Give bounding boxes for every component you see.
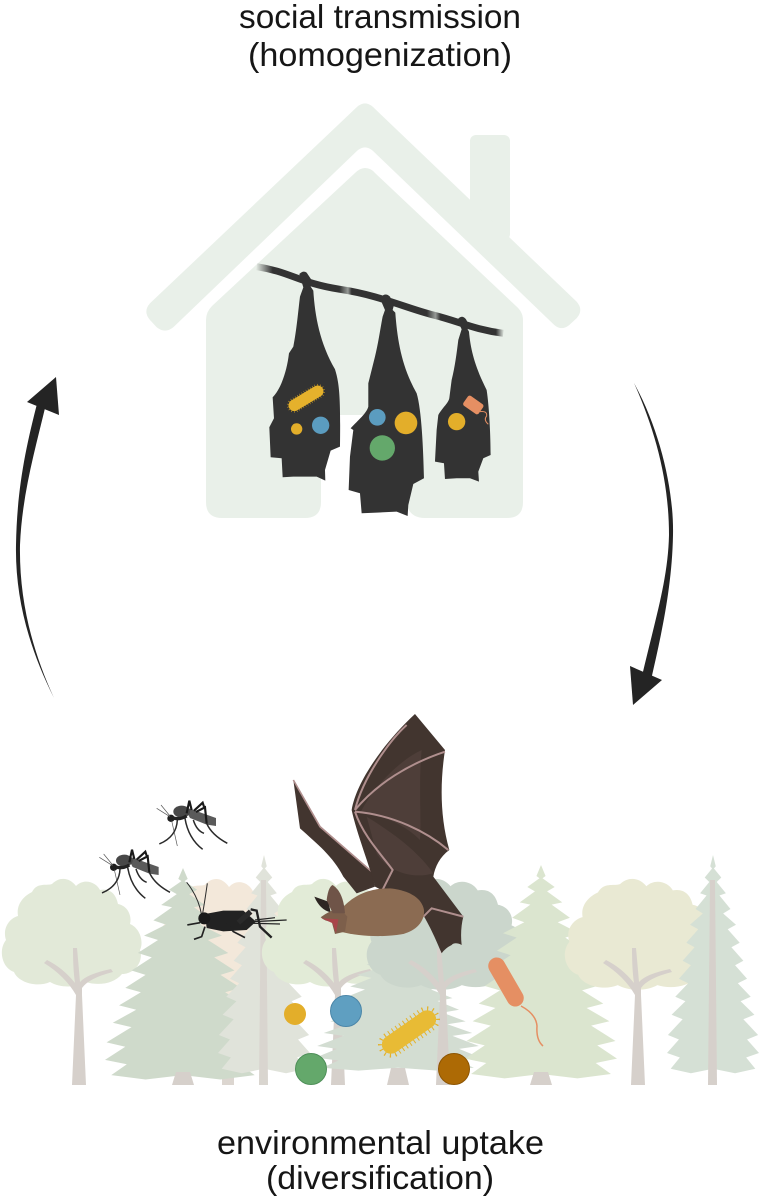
insect: mosquito upper — [157, 801, 227, 849]
bacteria: yellow coccus — [291, 423, 302, 435]
near ear — [327, 885, 345, 913]
bat silhouette: centre — [349, 295, 424, 516]
far wing — [293, 780, 375, 893]
bacteria: yellow rod — [286, 383, 325, 413]
tree: grey-green — [367, 879, 525, 1085]
title: social transmission: (homogenization) — [248, 36, 512, 73]
roost branch — [257, 267, 503, 333]
tree: orange — [155, 879, 295, 1085]
bacteria in the environment — [284, 954, 543, 1084]
house with roosting bats — [146, 103, 580, 518]
bacteria: green coccus — [370, 435, 395, 461]
bacteria: yellow coccus — [448, 413, 465, 430]
bacteria: blue coccus — [330, 996, 362, 1026]
fir: left — [105, 868, 261, 1085]
bacteria: blue coccus — [312, 417, 329, 434]
bat silhouette: right — [435, 317, 491, 482]
bacteria: orange flagellated rod — [485, 954, 543, 1046]
insect: cricket — [187, 882, 287, 939]
fir: right — [465, 865, 617, 1085]
bat: flying — [293, 714, 463, 953]
head — [321, 908, 347, 934]
arrow: right, downward — [630, 383, 673, 705]
bacteria: yellow spiky rod — [378, 1007, 440, 1057]
title: social transmission — [239, 0, 521, 73]
bacteria: yellow coccus — [395, 412, 417, 434]
icon: house — [146, 103, 580, 518]
far ear — [314, 897, 331, 912]
fir: far right — [667, 855, 759, 1085]
caption: environmental uptake — [217, 1124, 544, 1196]
caption: environmental uptake: environmental uptake — [217, 1124, 544, 1161]
bacteria: blue coccus — [369, 409, 386, 426]
bacteria: yellow coccus — [284, 1003, 306, 1025]
caption: environmental uptake: (diversification) — [266, 1159, 494, 1196]
fir: small pale — [218, 855, 310, 1085]
bat silhouette: left — [269, 272, 340, 481]
fir: centre — [316, 930, 480, 1085]
tree: left — [2, 879, 142, 1085]
near wing — [352, 714, 463, 953]
wing bones — [355, 725, 463, 917]
bacteria: brown coccus — [438, 1054, 470, 1084]
bacteria: orange rod — [462, 395, 488, 424]
arrow: left, upward — [16, 377, 59, 698]
body — [340, 888, 424, 936]
bacteria: green coccus — [296, 1054, 326, 1084]
forest — [2, 855, 759, 1085]
insect: mosquito lower — [99, 850, 170, 898]
tree: centre — [262, 879, 402, 1085]
tree: far right — [565, 879, 718, 1085]
mosquitoes — [99, 801, 227, 898]
mouth — [322, 918, 338, 933]
